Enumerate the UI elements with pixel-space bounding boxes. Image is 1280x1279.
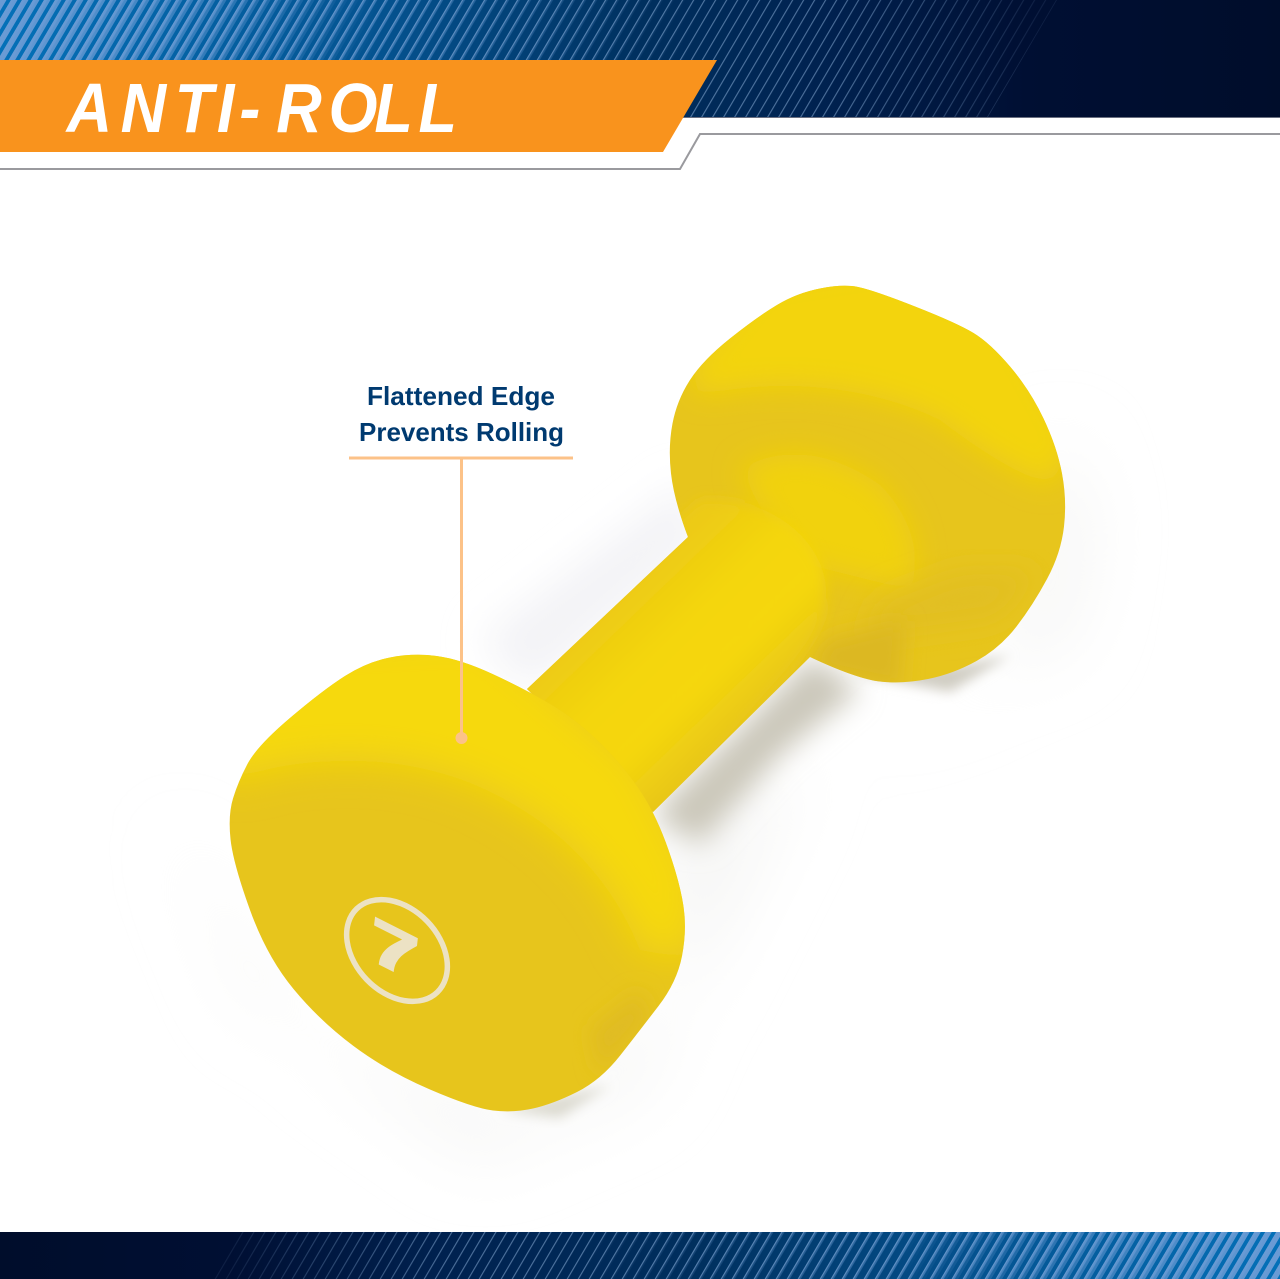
header outline rule bbox=[0, 134, 1280, 169]
dumbbell bbox=[230, 286, 1066, 1112]
callout text bbox=[359, 381, 564, 447]
title banner bbox=[0, 60, 717, 152]
weight marking: number 7 in oval: 7 bbox=[367, 903, 422, 995]
near weight bbox=[230, 654, 685, 1112]
header banner: striped navy band bbox=[0, 0, 1280, 118]
title text: ANTI-ROLL bbox=[65, 70, 457, 148]
callout text: Flattened Edge bbox=[367, 381, 555, 411]
callout text: Prevents Rolling bbox=[359, 417, 564, 447]
callout: flattened edge bbox=[349, 381, 573, 744]
footer banner: striped navy band bbox=[0, 1232, 1280, 1279]
far weight and handle bbox=[527, 286, 1066, 812]
weight marking: number 7 in oval bbox=[326, 880, 468, 1021]
callout leader line bbox=[349, 456, 573, 744]
soft shadow on the background bbox=[170, 430, 1090, 1160]
